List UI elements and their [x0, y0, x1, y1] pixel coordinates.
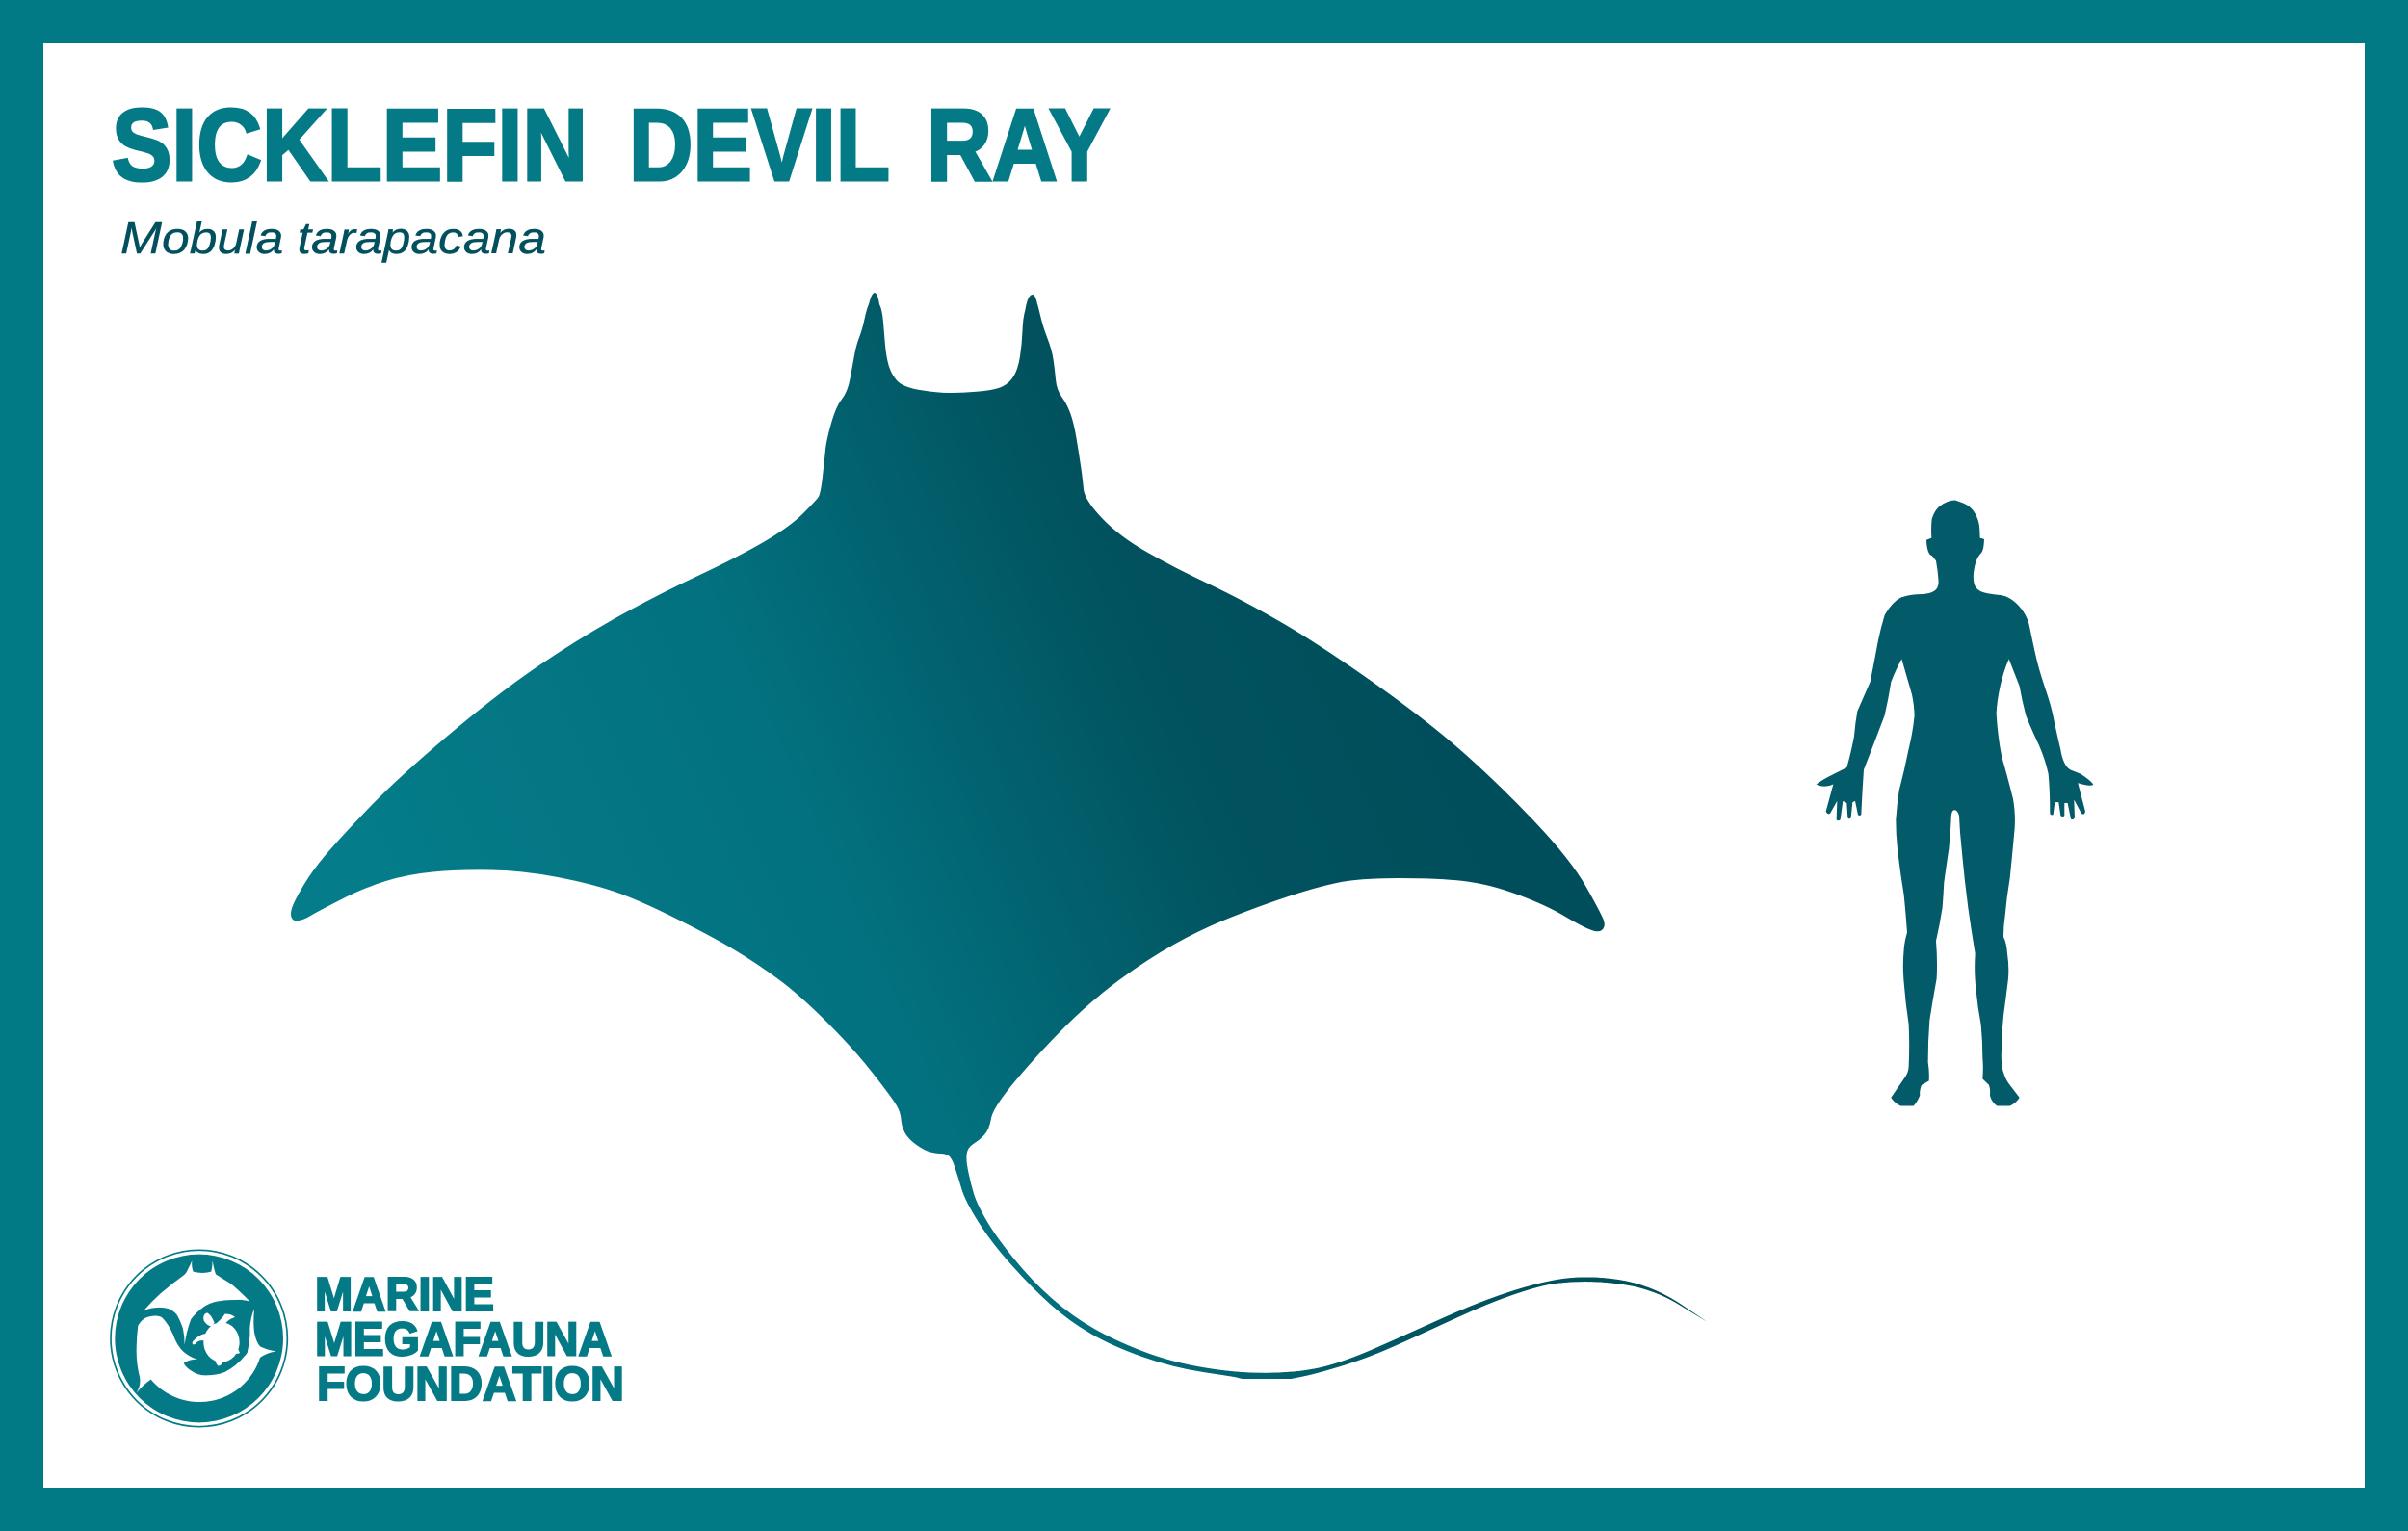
logo text: FOUNDATION	[317, 1359, 624, 1411]
logo text: MARINE	[315, 1269, 494, 1321]
title: SICKLEFIN	[112, 89, 588, 202]
foundation logo	[111, 1250, 624, 1427]
logo emblem	[111, 1250, 287, 1427]
title: RAY	[927, 89, 1110, 202]
tail colour overlay	[954, 1165, 1707, 1379]
logo text: MEGAFAUNA	[315, 1313, 612, 1365]
human silhouette	[1817, 501, 2093, 1106]
logo text	[315, 1269, 624, 1411]
ray silhouette with tail	[291, 293, 1707, 1379]
title	[112, 89, 1110, 202]
scientific name: Mobula tarapacana	[120, 213, 546, 263]
title: DEVIL	[629, 89, 890, 202]
